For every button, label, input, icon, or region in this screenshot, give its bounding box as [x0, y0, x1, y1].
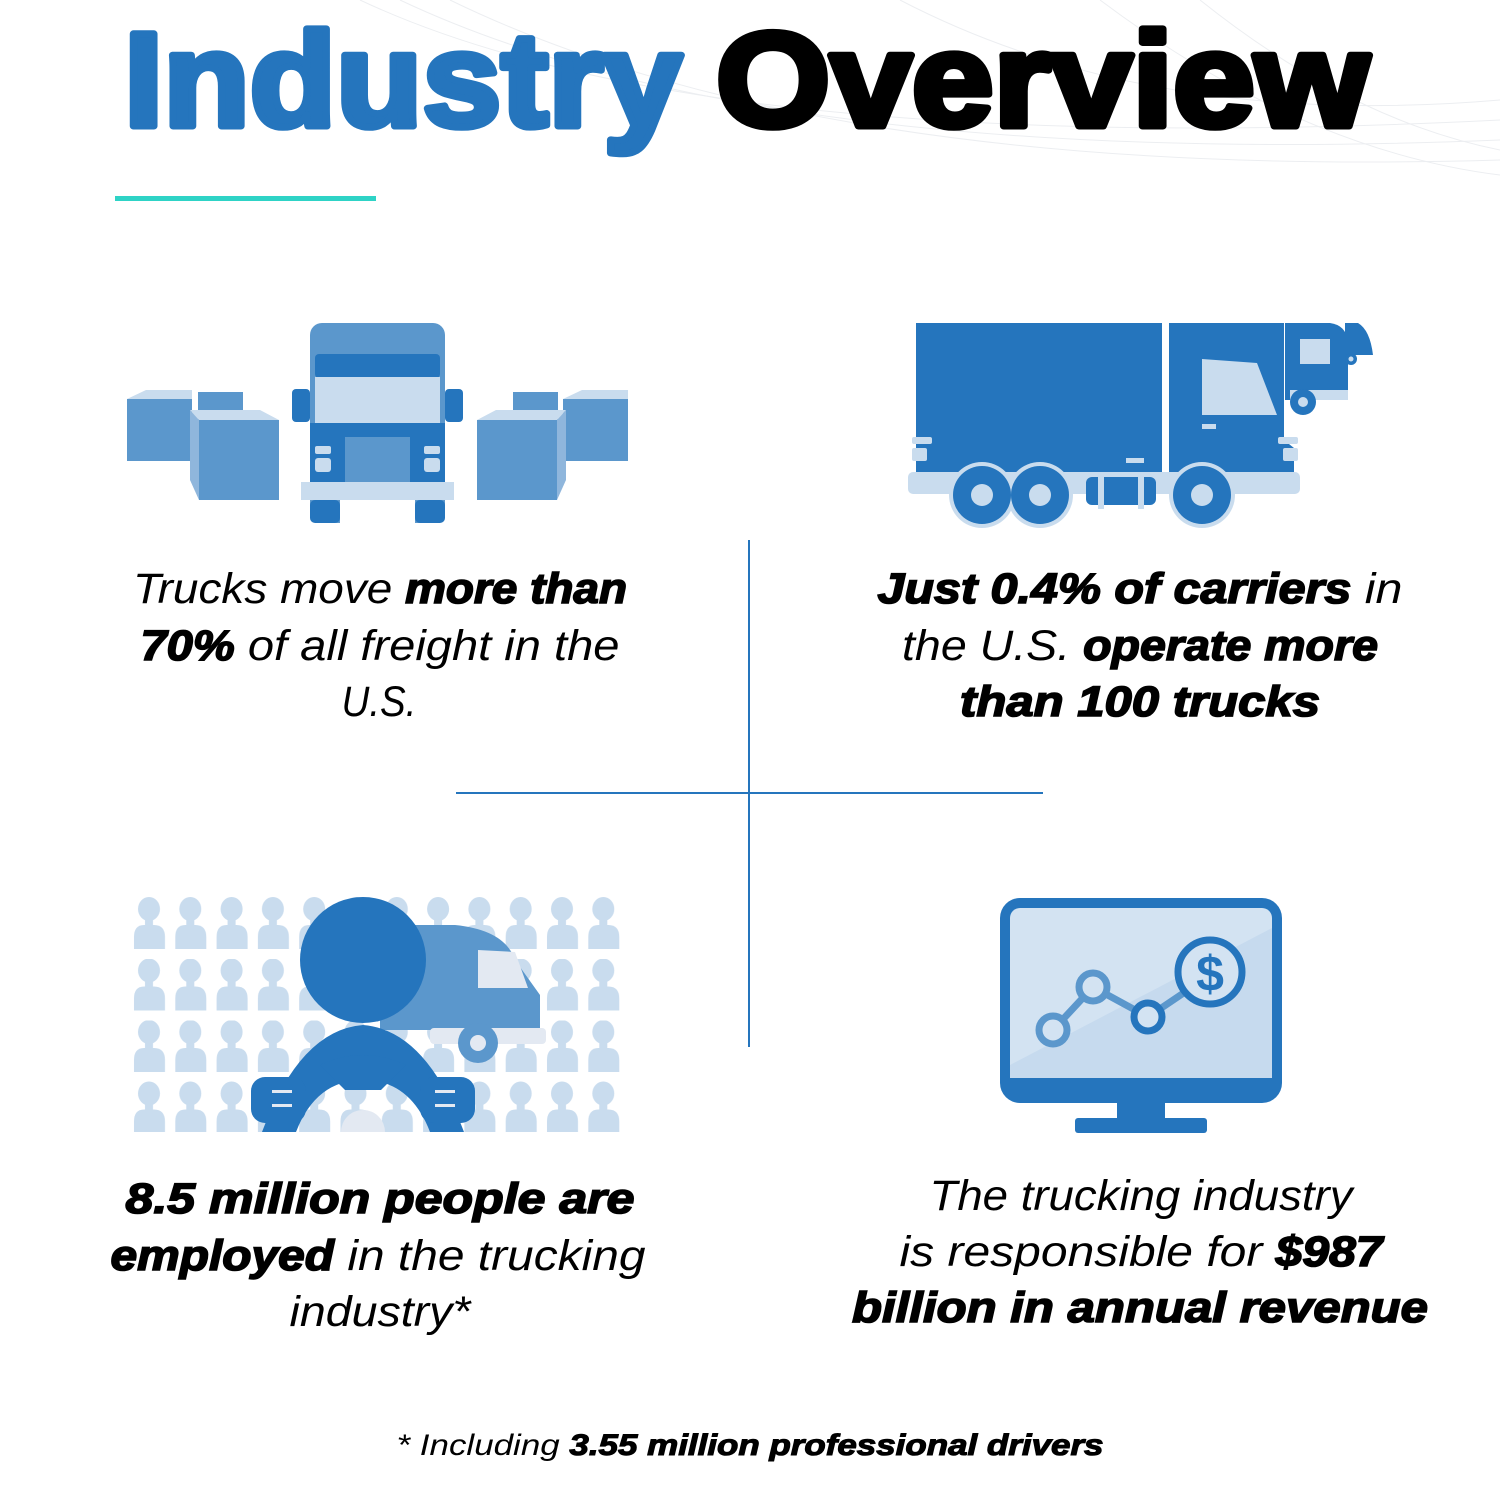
text: freight stat: Trucks move more than [133, 565, 627, 613]
text: freight stat: U.S. [342, 678, 416, 726]
text: employment stat: industry* [290, 1288, 472, 1336]
text: revenue stat: billion in annual revenue [852, 1284, 1428, 1332]
title [124, 6, 1370, 155]
text: revenue stat: The trucking industry [930, 1172, 1355, 1220]
text: carriers stat: the U.S. operate more [902, 622, 1378, 670]
icon: monitor with revenue chart [1000, 898, 1282, 1133]
text: carriers stat: than 100 trucks [960, 678, 1320, 726]
text: employment stat: 8.5 million people are [126, 1175, 634, 1223]
text: freight stat: 70% of all freight in the [140, 622, 620, 670]
decorative wave lines [360, 0, 1500, 175]
title: Industry [124, 6, 682, 155]
text: carriers stat [878, 565, 1403, 726]
text: employment stat: employed in the trucking [110, 1232, 646, 1280]
icon: monitor with revenue chart: $ [1196, 946, 1224, 1002]
text: revenue stat: is responsible for $987 [900, 1228, 1385, 1276]
footnote: * Including 3.55 million professional drivers [396, 1429, 1104, 1462]
icon: truck front with boxes [127, 323, 628, 523]
divider: horizontal [456, 792, 1043, 794]
title: Overview [716, 6, 1370, 155]
title underline accent [115, 196, 376, 201]
divider: vertical [748, 540, 750, 1047]
text: revenue stat [852, 1172, 1428, 1332]
text: freight stat [133, 565, 627, 726]
text: employment stat [110, 1175, 646, 1336]
icon: people grid with driver [132, 897, 628, 1132]
icon: trucks side view [908, 323, 1373, 528]
text: carriers stat: Just 0.4% of carriers in [878, 565, 1403, 613]
